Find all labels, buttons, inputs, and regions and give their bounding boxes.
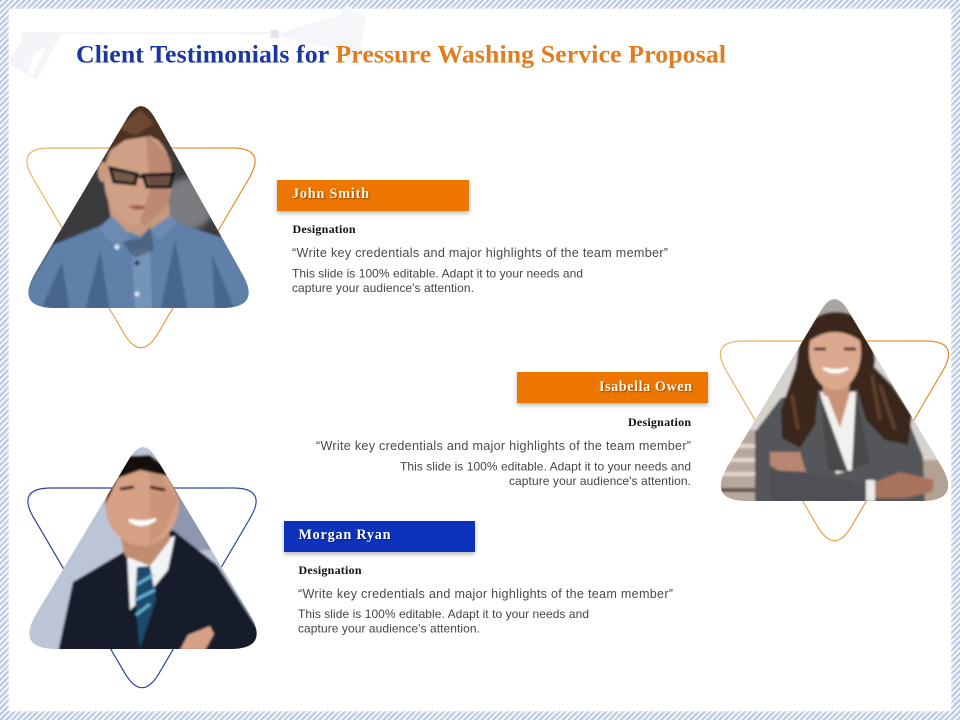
name bar: John Smith: [277, 180, 469, 211]
designation: Designation: [298, 563, 362, 577]
description: capture your audience's attention.: [509, 474, 691, 488]
name bar: Isabella Owen: [517, 372, 708, 403]
testimonial portrait: Isabella Owen: [720, 299, 950, 542]
description: This slide is 100% editable. Adapt it to your needs and: [292, 266, 583, 280]
description: capture your audience's attention.: [292, 281, 474, 295]
quote: “Write key credentials and major highlights of the team member”: [298, 587, 673, 601]
testimonial text: Morgan Ryan: [284, 521, 673, 636]
testimonial portrait: Morgan Ryan: [27, 447, 257, 688]
name bar: John Smith: John Smith: [292, 186, 369, 202]
name bar: Morgan Ryan: Morgan Ryan: [298, 527, 391, 543]
testimonial text: Isabella Owen: [316, 372, 708, 488]
designation: Designation: [628, 415, 691, 429]
description: This slide is 100% editable. Adapt it to your needs and: [298, 607, 589, 621]
title: Client Testimonials for Pressure Washing Service Proposal: [76, 40, 726, 68]
description: capture your audience's attention.: [298, 622, 480, 636]
name bar: Isabella Owen: Isabella Owen: [599, 379, 692, 395]
watermark: pressure washer gun: [8, 3, 365, 80]
testimonial portrait: John Smith: [26, 106, 256, 348]
description: This slide is 100% editable. Adapt it to your needs and: [400, 460, 691, 474]
quote: “Write key credentials and major highlights of the team member”: [316, 439, 691, 453]
designation: Designation: [292, 222, 356, 236]
quote: “Write key credentials and major highlights of the team member”: [292, 246, 668, 260]
testimonial text: John Smith: [277, 180, 668, 295]
name bar: Morgan Ryan: [284, 521, 475, 552]
